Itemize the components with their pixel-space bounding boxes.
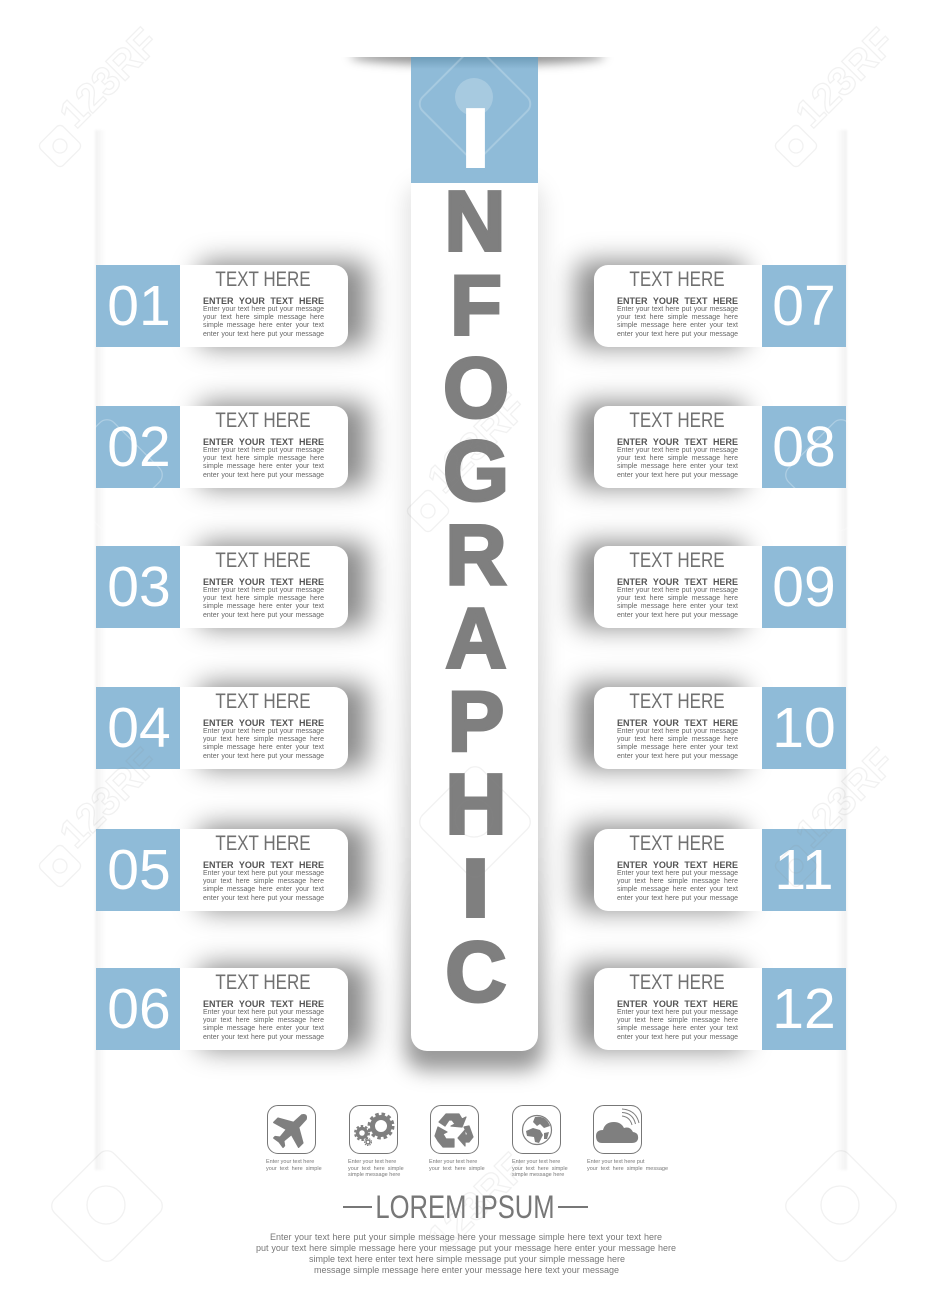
item 07: ENTER YOUR TEXT HERE — [617, 296, 738, 306]
item 07: simple message here enter your text — [617, 322, 738, 329]
item 09: 09 — [772, 555, 836, 619]
item 06: enter your text here put your message — [203, 1034, 324, 1041]
item 11: ENTER YOUR TEXT HERE — [617, 860, 738, 870]
item 12: simple message here enter your text — [617, 1025, 738, 1032]
item 03: 03 — [107, 555, 171, 619]
item 03: your text here simple message here — [203, 595, 324, 602]
item 07: enter your text here put your message — [617, 331, 738, 338]
vertical title INFOGRAPHIC: H — [445, 758, 507, 852]
footer heading: LOREM IPSUM — [375, 1189, 555, 1225]
item 08: TEXT HERE — [629, 409, 725, 432]
item 10: simple message here enter your text — [617, 744, 738, 751]
item 02: enter your text here put your message — [203, 472, 324, 479]
vertical title INFOGRAPHIC: A — [445, 592, 507, 686]
item 11 — [594, 829, 846, 911]
item 05: TEXT HERE — [215, 832, 311, 855]
footer paragraph — [256, 1232, 676, 1275]
caption 5: your text here simple message — [587, 1166, 668, 1172]
item 01: Enter your text here put your message — [203, 306, 324, 313]
vertical title INFOGRAPHIC — [418, 57, 532, 1020]
item 03: TEXT HERE — [215, 549, 311, 572]
item 05: your text here simple message here — [203, 878, 324, 885]
caption 4: Enter your text here — [512, 1159, 560, 1165]
item 11: simple message here enter your text — [617, 886, 738, 893]
footer paragraph: put your text here simple message here your message put your message here enter your message here — [256, 1243, 676, 1253]
item 09: simple message here enter your text — [617, 603, 738, 610]
item 05: ENTER YOUR TEXT HERE — [203, 860, 324, 870]
watermarks: 123RF — [787, 20, 903, 136]
item 04: 04 — [107, 696, 171, 760]
item 01: TEXT HERE — [215, 268, 311, 291]
item 05: Enter your text here put your message — [203, 870, 324, 877]
item 04: simple message here enter your text — [203, 744, 324, 751]
item 02 — [96, 406, 348, 488]
caption 3: Enter your text here — [429, 1159, 477, 1165]
item 01: simple message here enter your text — [203, 322, 324, 329]
caption 2: your text here simple — [348, 1166, 404, 1172]
item 10 — [594, 687, 846, 769]
item 06 — [96, 968, 348, 1050]
item 04: Enter your text here put your message — [203, 728, 324, 735]
item 11: Enter your text here put your message — [617, 870, 738, 877]
item 03: Enter your text here put your message — [203, 587, 324, 594]
item 07: your text here simple message here — [617, 314, 738, 321]
item 05: 05 — [107, 838, 171, 902]
item 12: your text here simple message here — [617, 1017, 738, 1024]
item 12 — [594, 968, 846, 1050]
watermarks: 123RF — [419, 385, 535, 501]
footer paragraph: message simple message here enter your message here text your message — [314, 1265, 619, 1275]
item 05: simple message here enter your text — [203, 886, 324, 893]
caption 1: your text here simple — [266, 1166, 322, 1172]
watermarks: 123RF — [51, 20, 167, 136]
item 11: your text here simple message here — [617, 878, 738, 885]
watermarks: 123RF — [787, 740, 903, 856]
vertical title INFOGRAPHIC: I — [457, 840, 494, 937]
central title column — [411, 57, 538, 1051]
caption 2: simple message here — [348, 1172, 400, 1178]
vertical title INFOGRAPHIC: R — [445, 508, 507, 604]
item 07: TEXT HERE — [629, 268, 725, 291]
item 09: ENTER YOUR TEXT HERE — [617, 577, 738, 587]
vertical title INFOGRAPHIC: I — [457, 90, 494, 187]
caption 1 — [266, 1159, 322, 1172]
caption 2: Enter your text here — [348, 1159, 396, 1165]
item 08: your text here simple message here — [617, 455, 738, 462]
item 07 — [594, 265, 846, 347]
vertical title INFOGRAPHIC: N — [444, 174, 506, 270]
item 03 — [96, 546, 348, 628]
item 06: simple message here enter your text — [203, 1025, 324, 1032]
item 07: Enter your text here put your message — [617, 306, 738, 313]
side strip left — [95, 130, 106, 1170]
item 10: your text here simple message here — [617, 736, 738, 743]
item 11: enter your text here put your message — [617, 895, 738, 902]
item 01: ENTER YOUR TEXT HERE — [203, 296, 324, 306]
side strip right — [836, 130, 847, 1170]
item 09: TEXT HERE — [629, 549, 725, 572]
vertical title INFOGRAPHIC: G — [443, 424, 509, 519]
item 06: Enter your text here put your message — [203, 1009, 324, 1016]
item 08: Enter your text here put your message — [617, 447, 738, 454]
item 04: enter your text here put your message — [203, 753, 324, 760]
item 04: TEXT HERE — [215, 690, 311, 713]
item 10: enter your text here put your message — [617, 753, 738, 760]
item 10: ENTER YOUR TEXT HERE — [617, 718, 738, 728]
item 05 — [96, 829, 348, 911]
item 02: simple message here enter your text — [203, 463, 324, 470]
item 02: your text here simple message here — [203, 455, 324, 462]
item 08: ENTER YOUR TEXT HERE — [617, 437, 738, 447]
item 10: TEXT HERE — [629, 690, 725, 713]
item 01: enter your text here put your message — [203, 331, 324, 338]
item 06: TEXT HERE — [215, 971, 311, 994]
caption 3 — [429, 1159, 485, 1172]
item 03: simple message here enter your text — [203, 603, 324, 610]
item 03: enter your text here put your message — [203, 612, 324, 619]
icon: airplane — [267, 1105, 316, 1154]
vertical title INFOGRAPHIC: O — [443, 341, 509, 436]
item 06: 06 — [107, 977, 171, 1041]
icon: gears — [349, 1105, 398, 1154]
icon: cloud with signal — [593, 1105, 642, 1154]
icon: globe — [512, 1105, 561, 1154]
item 09: enter your text here put your message — [617, 612, 738, 619]
caption 5 — [587, 1159, 668, 1172]
item 02: 02 — [107, 415, 171, 479]
item 02: ENTER YOUR TEXT HERE — [203, 437, 324, 447]
icon: recycle — [430, 1105, 479, 1154]
item 01 — [96, 265, 348, 347]
caption 3: your text here simple — [429, 1166, 485, 1172]
vertical title INFOGRAPHIC: C — [445, 925, 507, 1020]
item 12: TEXT HERE — [629, 971, 725, 994]
top shadow — [348, 57, 608, 71]
item 06: your text here simple message here — [203, 1017, 324, 1024]
item 08: enter your text here put your message — [617, 472, 738, 479]
item 04 — [96, 687, 348, 769]
footer paragraph: Enter your text here put your simple message here your message simple here text your text here — [270, 1232, 662, 1242]
item 12: ENTER YOUR TEXT HERE — [617, 999, 738, 1009]
item 09: Enter your text here put your message — [617, 587, 738, 594]
item 08 — [594, 406, 846, 488]
item 08: simple message here enter your text — [617, 463, 738, 470]
item 10: 10 — [772, 696, 836, 760]
watermarks: 123RF — [419, 1145, 535, 1261]
item 01: your text here simple message here — [203, 314, 324, 321]
caption 4: simple message here — [512, 1172, 564, 1178]
caption 1: Enter your text here — [266, 1159, 314, 1165]
item 07: 07 — [772, 274, 836, 338]
item 06: ENTER YOUR TEXT HERE — [203, 999, 324, 1009]
row shadows — [198, 261, 368, 347]
item 11: 11 — [774, 838, 834, 902]
vertical title INFOGRAPHIC: P — [448, 674, 504, 770]
item 04: ENTER YOUR TEXT HERE — [203, 718, 324, 728]
item 01: 01 — [107, 274, 171, 338]
item 12: 12 — [772, 977, 836, 1041]
caption 4 — [512, 1159, 568, 1178]
item 05: enter your text here put your message — [203, 895, 324, 902]
item 09 — [594, 546, 846, 628]
caption 2 — [348, 1159, 404, 1178]
item 10: Enter your text here put your message — [617, 728, 738, 735]
item 08: 08 — [772, 415, 836, 479]
caption 4: your text here simple — [512, 1166, 568, 1172]
item 12: enter your text here put your message — [617, 1034, 738, 1041]
item 02: Enter your text here put your message — [203, 447, 324, 454]
caption 5: Enter your text here put — [587, 1159, 644, 1165]
watermarks: 123RF — [51, 740, 167, 856]
footer paragraph: simple text here enter text here simple message put your simple message here — [309, 1254, 625, 1264]
item 09: your text here simple message here — [617, 595, 738, 602]
item 04: your text here simple message here — [203, 736, 324, 743]
item 02: TEXT HERE — [215, 409, 311, 432]
item 11: TEXT HERE — [629, 832, 725, 855]
center column shadow — [405, 183, 544, 1070]
item 12: Enter your text here put your message — [617, 1009, 738, 1016]
item 03: ENTER YOUR TEXT HERE — [203, 577, 324, 587]
vertical title INFOGRAPHIC: F — [450, 258, 502, 354]
blue header block — [411, 57, 538, 183]
